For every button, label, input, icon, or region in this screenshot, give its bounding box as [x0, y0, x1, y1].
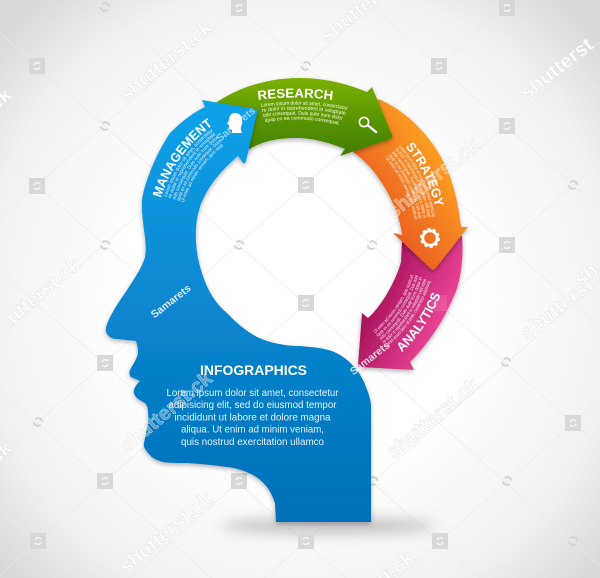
- overlaid watermarks: Samarets: [149, 282, 194, 321]
- icon: magnifier: [359, 117, 376, 132]
- icon: person head: [227, 113, 242, 133]
- infographics body text: incididunt ut labore et dolore magna: [174, 412, 331, 424]
- overlaid watermarks: Samarets: [348, 339, 393, 378]
- strategy text: re dolor in reprehenderit in voluptate velit esse: [396, 148, 430, 217]
- research label: RESEARCH: [258, 88, 333, 100]
- management label: MANAGEMENT: [152, 118, 211, 198]
- watermark text: shutterst: [517, 274, 598, 344]
- watermark text: shutterst.ck: [116, 16, 217, 106]
- infographics title: INFOGRAPHICS: [200, 363, 307, 378]
- research text: [260, 100, 348, 125]
- overlaid watermarks: shutterst.ck: [383, 133, 484, 223]
- research text: re dolor in reprehenderit in voluptate: [262, 106, 346, 115]
- overlaid watermarks: Samarets: [214, 105, 258, 144]
- ground shadow: [220, 518, 436, 534]
- strategy label: STRATEGY: [406, 142, 444, 205]
- management text: Lorem ipsum dolor sit amet, consectetur: [164, 129, 212, 197]
- strategy text: odo consequat. Duis aute irure dolor in: [392, 152, 426, 218]
- analytics text: odo consequat. Duis aute irure dolor in: [380, 277, 422, 340]
- infographics body text: [166, 388, 339, 448]
- analytics text: Ut enim ad minim veniam, quis nostrud: [373, 274, 414, 333]
- management text: re dolor in reprehenderit in voluptate: [168, 133, 216, 198]
- strategy text: iquip ex ea commodo consequat. Duis aute: [388, 154, 422, 219]
- research text: iquip ex ea commodo consequat.: [264, 116, 340, 125]
- strategy text: Lorem ipsum dolor sit amet, consectetur adipiscing: [398, 144, 435, 217]
- overlaid watermarks: [116, 105, 484, 457]
- management text: iquip ex ea commodo consequat. Duis: [176, 140, 221, 201]
- infographics body text: aliqua. Ut enim ad minim veniam,: [181, 424, 324, 436]
- arrow: strategy: [352, 99, 468, 274]
- analytics text: re dolor in reprehenderit in voluptate velit esse: [382, 279, 426, 344]
- head with management arrow: [103, 100, 374, 526]
- watermark text: shutterst.ck: [116, 488, 217, 578]
- watermark text: utterst.ck: [2, 253, 86, 329]
- management text: Ut enim ad minim veniam, quis nost: [180, 144, 224, 202]
- arrow: research: [216, 77, 394, 159]
- strategy text: Ut enim ad minim veniam, quis nostrud: [386, 156, 418, 219]
- arrow: analytics: [356, 236, 466, 374]
- research text: Lorem ipsum dolor sit amet, consectetur: [260, 100, 348, 110]
- watermark text: shutterst.ck: [383, 373, 484, 463]
- management text: odo consequat. Duis aute irure dolor: [173, 136, 218, 200]
- analytics text: iquip ex ea commodo consequat. Duis aute: [376, 275, 418, 337]
- infographics body text: quis nostrud exercitation ullamco: [181, 437, 324, 448]
- watermark text: shutterst: [517, 34, 598, 104]
- analytics text: Lorem ipsum dolor sit amet, consectetur adipiscing: [384, 280, 432, 347]
- infographics body text: adipisicing elit, sed do eiusmod tempor: [168, 400, 337, 411]
- icon: gear: [421, 229, 439, 247]
- overlaid watermarks: shutterst.ck: [116, 367, 217, 457]
- analytics label: ANALYTICS: [398, 292, 440, 352]
- research text: odo consequat. Duis aute irure dolor: [263, 111, 343, 120]
- infographics body text: Lorem ipsum dolor sit amet, consectetur: [166, 388, 339, 399]
